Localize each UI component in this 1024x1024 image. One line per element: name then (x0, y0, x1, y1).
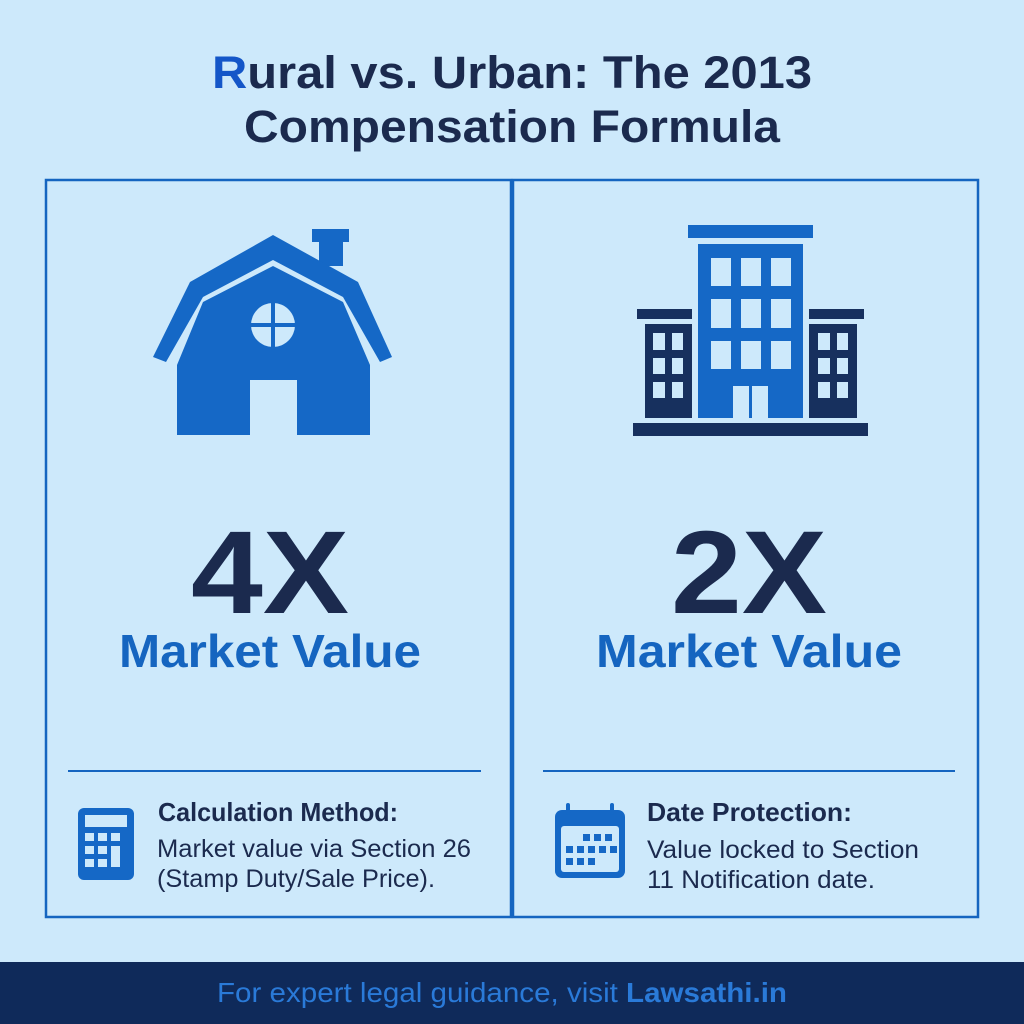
big number 4X: 4X (191, 507, 349, 639)
footer: For expert legal guidance, visit Lawsathi.in (217, 977, 787, 1008)
text: calculation method: (Stamp Duty/Sale Price). (157, 865, 435, 893)
text: calculation method (157, 797, 471, 893)
text: date protection (647, 797, 919, 894)
icon: city buildings (633, 225, 868, 436)
title: Compensation Formula (244, 101, 781, 152)
title (212, 47, 812, 152)
title: Rural vs. Urban: The 2013 (212, 47, 812, 98)
icon: calendar (555, 803, 625, 878)
text: calculation method: Market value via Section 26 (157, 835, 471, 863)
icon: calculator (78, 808, 134, 880)
big number 2X: 2X (671, 507, 827, 639)
label: market value: Market Value (119, 625, 421, 677)
label: market value: Market Value (596, 625, 902, 677)
panel: urban (510, 180, 978, 917)
footer (0, 962, 1024, 1024)
icon: barn house (153, 229, 392, 435)
text: date protection: Date Protection: (647, 797, 852, 827)
text: date protection: 11 Notification date. (647, 866, 875, 894)
text: date protection: Value locked to Section (647, 836, 919, 864)
text: calculation method: Calculation Method: (158, 797, 398, 827)
panel: rural (46, 180, 511, 917)
